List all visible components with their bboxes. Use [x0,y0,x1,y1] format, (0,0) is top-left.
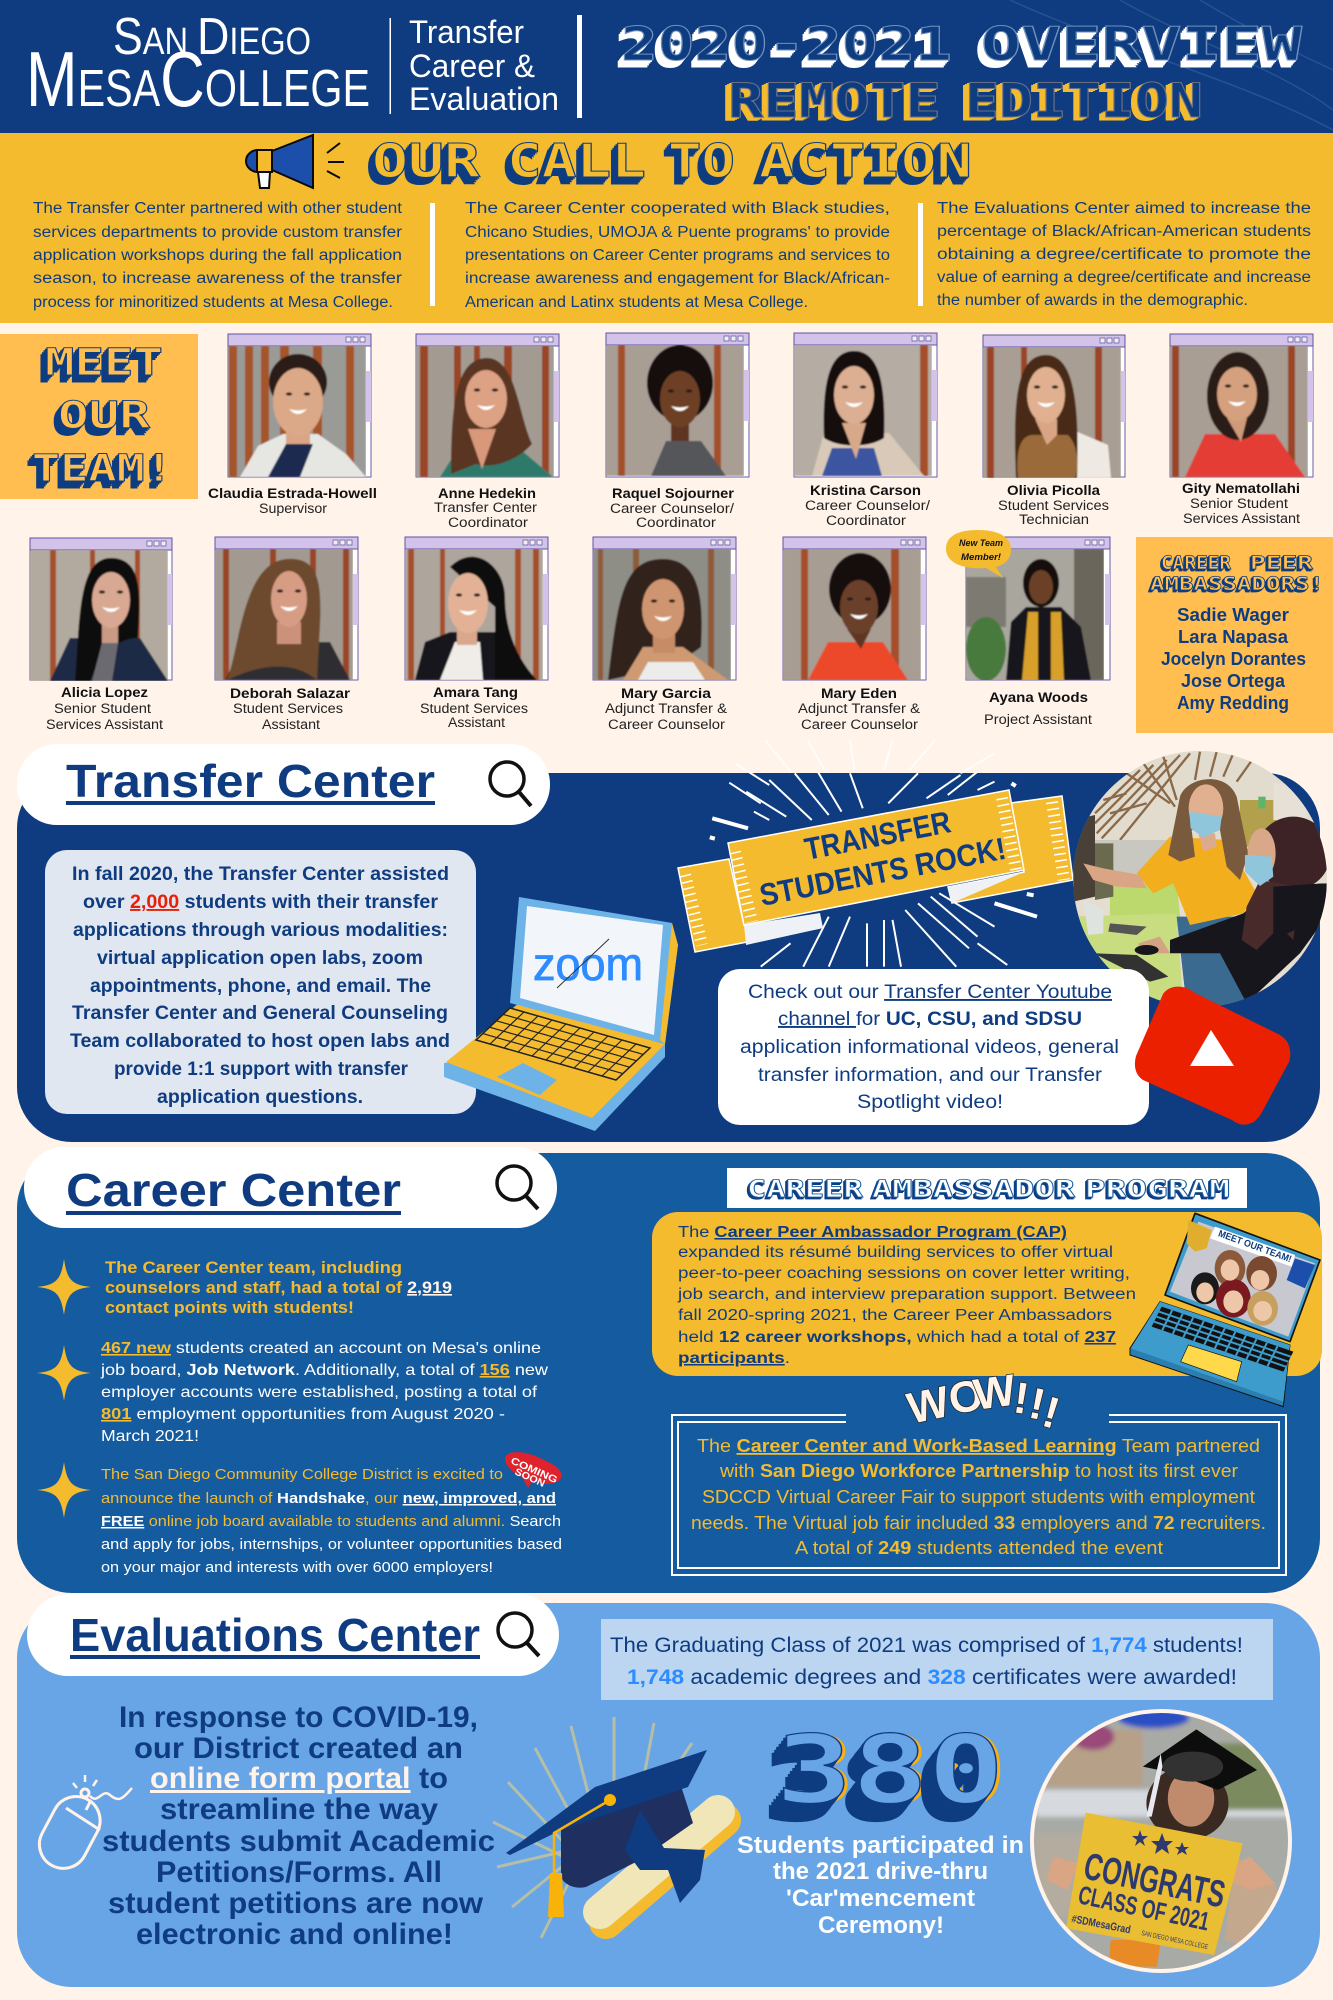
text: handshake: and apply for jobs, internships, or volunteer opportunities based [101,1536,562,1553]
text: transfer center goal: season, to increase awareness of the transfer [33,270,402,287]
team captions row 2: Deborah Salazar [230,685,351,701]
heading pill: transfer center [17,744,550,825]
badge: coming soon: SOON [513,1467,546,1490]
panel: transfer center [17,740,1333,1142]
icon: laptop with bitmoji team [1130,1213,1320,1407]
text: transfer center goal: process for minoritized students at Mesa College. [33,294,393,311]
team captions row 2: Project Assistant [984,712,1092,727]
icon: star 2 [37,1345,91,1401]
team captions row 1: Technician [1019,512,1089,527]
panel: meet our team [0,334,198,499]
panel: call to action [0,133,1333,323]
heading pill: career center: Career Center [66,1164,401,1216]
team captions row 2 [46,684,1092,732]
text: carmencement: Students participated in [737,1832,1024,1859]
title: overview: 2020-2021 [621,17,952,71]
text box: youtube channel: application informational videos, general [740,1037,1119,1058]
team captions row 2: Adjunct Transfer & [605,701,727,716]
team captions row 1 [208,480,1300,530]
team captions row 2: Services Assistant [46,717,163,732]
heading: our call to action [372,134,972,188]
text: contact points: counselors and staff, had a total of 2,919 [105,1279,452,1297]
frame: career fair results: SDCCD Virtual Career Fair to support students with employment [702,1487,1255,1507]
team captions row 1: Services Assistant [1183,511,1300,526]
text: job network: 467 new students created an account on Mesa's online [101,1340,541,1357]
text: career center goal: Chicano Studies, UMOJA & Puente programs' to provide [465,224,890,241]
team captions row 1: Anne Hedekin [438,485,536,501]
title: overview [621,17,1302,71]
team captions row 1: Transfer Center [434,500,538,515]
number: 380: 380 [776,1716,1004,1825]
badge: coming soon: COMING [509,1456,559,1486]
icon: laptop with zoom [444,897,678,1131]
team captions row 2: Student Services [233,701,343,716]
team captions row 2: Student Services [420,701,528,716]
team captions row 1: Senior Student [1190,496,1288,511]
heading: our call to action: ACTION [759,134,972,188]
text: career center goal: presentations on Career Center programs and services to [465,247,890,264]
header band [0,0,1333,133]
frame: career fair results: The Career Center and Work-Based Learning Team partnered [697,1436,1260,1456]
title: remote edition [728,74,1203,129]
department names [409,14,559,117]
speech bubble: new team member: Member! [961,552,1001,563]
title: remote edition: REMOTE [728,74,941,129]
text box: career peer ambassador program [652,1212,1322,1376]
team captions row 1: Coordinator [636,515,717,530]
text box: transfer summary: over 2,000 students with their transfer [83,892,439,913]
text: evaluations center goal: value of earning a degree/certificate and increase [937,269,1311,286]
text: handshake: announce the launch of Handshake , our new, improved, and [101,1490,556,1507]
team captions row 1: Coordinator [448,515,529,530]
text box: career peer ambassador program: fall 2020-spring 2021, the Career Peer Ambassadors [678,1307,1112,1324]
panel: meet our team: TEAM! [32,447,173,490]
banner: transfer students rock [678,790,1073,952]
text box: transfer summary: provide 1:1 support with transfer [114,1059,409,1080]
icon: star 3 [37,1462,91,1518]
team captions row 2: Assistant [448,715,505,730]
sign text [1070,1830,1229,1951]
panel: career peer ambassadors: Amy Redding [1177,693,1289,713]
sign text: CONGRATS [1080,1846,1229,1917]
photo: students at computer [1070,750,1333,1007]
team captions row 1: Supervisor [259,501,328,516]
team captions row 1: Career Counselor/ [610,501,734,516]
team photo: Olivia Picolla [983,335,1125,478]
department names: Evaluation [409,81,559,117]
heading: our call to action: TO [668,134,735,188]
text: job network: 801 employment opportunities from August 2020 - [101,1406,505,1423]
team captions row 1: Raquel Sojourner [612,485,735,501]
text box: career peer ambassador program: expanded its résumé building services to offer virtual [678,1244,1113,1261]
text: contact points: contact points with students! [105,1299,354,1317]
logo: San Diego Mesa College: SAN DIEGO [113,8,311,66]
team photo: Mary Garcia [593,537,736,680]
text: carmencement: the 2021 drive-thru [773,1858,988,1885]
team captions row 1: Gity Nematollahi [1182,480,1300,496]
speech bubble: new team member [946,530,1011,578]
text box: youtube channel: Check out our Transfer Center Youtube [748,982,1112,1003]
team captions row 2: Alicia Lopez [61,684,148,700]
icon: laptop with bitmoji team: MEET OUR TEAM! [1217,1228,1293,1265]
text box: transfer summary: virtual application open labs, zoom [97,948,423,969]
frame: career fair results: A total of 249 students attended the event [795,1538,1163,1558]
panel: career peer ambassadors: PEER [1250,552,1314,574]
text: online form portal: electronic and online! [136,1918,453,1951]
text: evaluations center goal: obtaining a degree/certificate to promote the [937,246,1311,263]
panel: career peer ambassadors: CAREER [1161,552,1232,574]
team captions row 1: Claudia Estrada-Howell [208,485,377,501]
team captions row 2: Adjunct Transfer & [798,701,920,716]
sunburst rays [710,740,1037,967]
icon: youtube play [1135,987,1290,1125]
panel: career peer ambassadors: Jose Ortega [1181,671,1286,691]
team captions row 2: Career Counselor [608,717,726,732]
team captions row 2: Mary Garcia [621,685,711,701]
text box: graduating class: 1,748 academic degrees and 328 certificates were awarded! [627,1666,1237,1689]
text: transfer center goal: application workshops during the fall application [33,247,402,264]
photo: graduate with sign [1029,1707,1296,1973]
panel: meet our team: MEET [45,341,163,384]
department names: Career & [409,48,535,84]
text box: transfer summary: applications through various modalities: [73,920,448,941]
text box: career peer ambassador program: The Career Peer Ambassador Program (CAP) [678,1224,1067,1241]
heading: career ambassador program: PROGRAM [1085,1175,1230,1203]
text: transfer center goal: services departments to provide custom transfer [33,224,402,241]
icon: computer mouse [31,1775,132,1877]
text: career center goal: The Career Center cooperated with Black studies, [465,200,890,217]
text box: youtube channel: Spotlight video! [857,1092,1003,1113]
panel: career peer ambassadors [1136,537,1333,733]
team captions row 2: Assistant [262,717,320,732]
heading pill: evaluations center: Evaluations Center [70,1609,480,1661]
team photo: Deborah Salazar [215,537,358,680]
heading: our call to action: CALL [507,134,646,188]
team photo: Alicia Lopez [30,538,172,681]
heading: career ambassador program: AMBASSADOR [872,1175,1076,1203]
text box: transfer summary: application questions. [157,1087,363,1108]
team captions row 1: Student Services [998,498,1109,513]
text box: youtube channel: transfer information, and our Transfer [758,1065,1103,1086]
panel: career peer ambassadors: Jocelyn Dorantes [1161,649,1306,669]
text: handshake: on your major and interests with over 6000 employers! [101,1559,493,1576]
text: online form portal: online form portal to [150,1762,448,1795]
panel: career peer ambassadors: Sadie Wager [1177,605,1289,625]
text: evaluations center goal: The Evaluations Center aimed to increase the [937,200,1311,217]
title: overview: OVERVIEW [981,17,1302,71]
text box: career peer ambassador program: held 12 career workshops, which had a total of 237 [678,1329,1116,1346]
logo: San Diego Mesa College: MESACOLLEGE [26,35,370,123]
icon: graduation cap and diploma [493,1717,724,1938]
text box: transfer summary: Team collaborated to host open labs and [70,1031,450,1052]
icon: laptop with zoom: zoom [533,938,643,990]
heading: career ambassador program: CAREER [747,1175,864,1203]
speech bubble: new team member: New Team [959,538,1004,549]
team captions row 1: Olivia Picolla [1007,482,1100,498]
text: career center goal: American and Latinx students at Mesa College. [465,294,808,311]
text: transfer center goal: The Transfer Center partnered with other student [33,200,403,217]
heading: our call to action: OUR [372,134,480,188]
frame: career fair results: needs. The Virtual job fair included 33 employers and 72 recruiters. [691,1513,1266,1533]
text: handshake: The San Diego Community College District is excited to [101,1466,503,1483]
sign text: CLASS OF 2021 [1076,1880,1212,1937]
text: career center goal [465,200,890,311]
team captions row 1: Career Counselor/ [805,498,930,513]
panel: meet our team: OUR [58,394,151,437]
team photo: Mary Eden [783,537,926,680]
team photo: Kristina Carson [794,333,937,477]
department names: Transfer [409,14,524,50]
text box: transfer summary: In fall 2020, the Transfer Center assisted [72,864,449,885]
team captions row 2: Ayana Woods [989,689,1088,705]
text: handshake [101,1466,562,1576]
sign text: SAN DIEGO MESA COLLEGE [1141,1930,1209,1951]
text box: career peer ambassador program: peer-to-peer coaching sessions on cover letter writing, [678,1265,1130,1282]
team photo: Amara Tang [405,537,548,680]
text box: transfer summary: appointments, phone, and email. The [90,976,431,997]
text: online form portal: students submit Academic [102,1825,495,1858]
panel: career center [17,1147,1322,1593]
text: online form portal: In response to COVID-19, [119,1701,478,1734]
text: carmencement [737,1832,1024,1939]
panel: career peer ambassadors: Lara Napasa [1178,627,1289,647]
text box: transfer summary [45,850,476,1114]
team captions row 1: Coordinator [826,513,907,528]
text box: graduating class: The Graduating Class of 2021 was comprised of 1,774 students! [610,1634,1243,1657]
text box: career peer ambassador program: participants . [678,1350,790,1367]
logo: San Diego Mesa College [26,8,370,123]
heading pill: evaluations center [27,1594,559,1676]
logo divider [390,18,391,114]
heading pill: career center [24,1147,557,1228]
heading: career ambassador program [727,1168,1247,1208]
text: job network: employer accounts were established, posting a total of [101,1384,538,1401]
text: contact points [105,1259,452,1317]
team captions row 2: Mary Eden [821,685,897,701]
text: online form portal [102,1701,495,1951]
text: career center goal: increase awareness and engagement for Black/African- [465,270,890,287]
icon: megaphone [246,135,344,188]
text: evaluations center goal [937,200,1311,309]
text box: youtube channel: channel for UC, CSU, and SDSU [778,1009,1082,1030]
text: transfer center goal [33,200,403,311]
text: online form portal: student petitions are now [108,1887,484,1920]
banner: transfer students rock: STUDENTS ROCK! [757,831,1009,913]
icon: star 1 [37,1259,91,1315]
header divider [577,15,582,118]
frame: career fair results: with San Diego Workforce Partnership to host its first ever [719,1461,1238,1481]
frame: career fair results [672,1415,1286,1575]
team captions row 2: Senior Student [54,701,151,716]
team photo: Anne Hedekin [416,334,559,477]
team photo: Gity Nematollahi [1170,334,1313,477]
title: remote edition: EDITION [965,74,1203,129]
text: job network [100,1340,549,1445]
text box: graduating class [601,1619,1273,1700]
text: carmencement: Ceremony! [818,1912,944,1939]
badge: coming soon [505,1452,562,1490]
text: job network: job board, Job Network . Additionally, a total of 156 new [100,1362,549,1379]
text: evaluations center goal: the number of awards in the demographic. [937,292,1248,309]
wow text: WOW!!! [903,1366,1065,1439]
team captions row 2: Career Counselor [801,717,919,732]
panel: career peer ambassadors: AMBASSADORS! [1150,573,1324,595]
banner: transfer students rock: TRANSFER [802,804,954,867]
text box: youtube channel [718,969,1149,1125]
text box: transfer summary: Transfer Center and General Counseling [72,1003,448,1024]
team photo: Claudia Estrada-Howell [228,334,371,477]
team photo: Ayana Woods [966,537,1110,681]
sign text: #SDMesaGrad [1070,1913,1132,1936]
text: contact points: The Career Center team, including [105,1259,402,1277]
heading pill: transfer center: Transfer Center [66,755,435,807]
text: evaluations center goal: percentage of Black/African-American students [937,223,1311,240]
text: job network: March 2021! [101,1428,199,1445]
text: online form portal: our District created an [134,1732,463,1765]
team captions row 1: Kristina Carson [810,482,921,498]
text: online form portal: Petitions/Forms. All [156,1856,442,1889]
text: carmencement: 'Car'mencement [786,1885,975,1912]
text: handshake: FREE online job board available to students and alumni. Search [101,1513,561,1530]
text: online form portal: streamline the way [160,1793,438,1826]
team captions row 2: Amara Tang [433,684,518,700]
team photo: Raquel Sojourner [606,333,749,477]
panel: evaluations center [17,1594,1320,1987]
text box: career peer ambassador program: job search, and interview preparation support. Between [677,1286,1136,1303]
